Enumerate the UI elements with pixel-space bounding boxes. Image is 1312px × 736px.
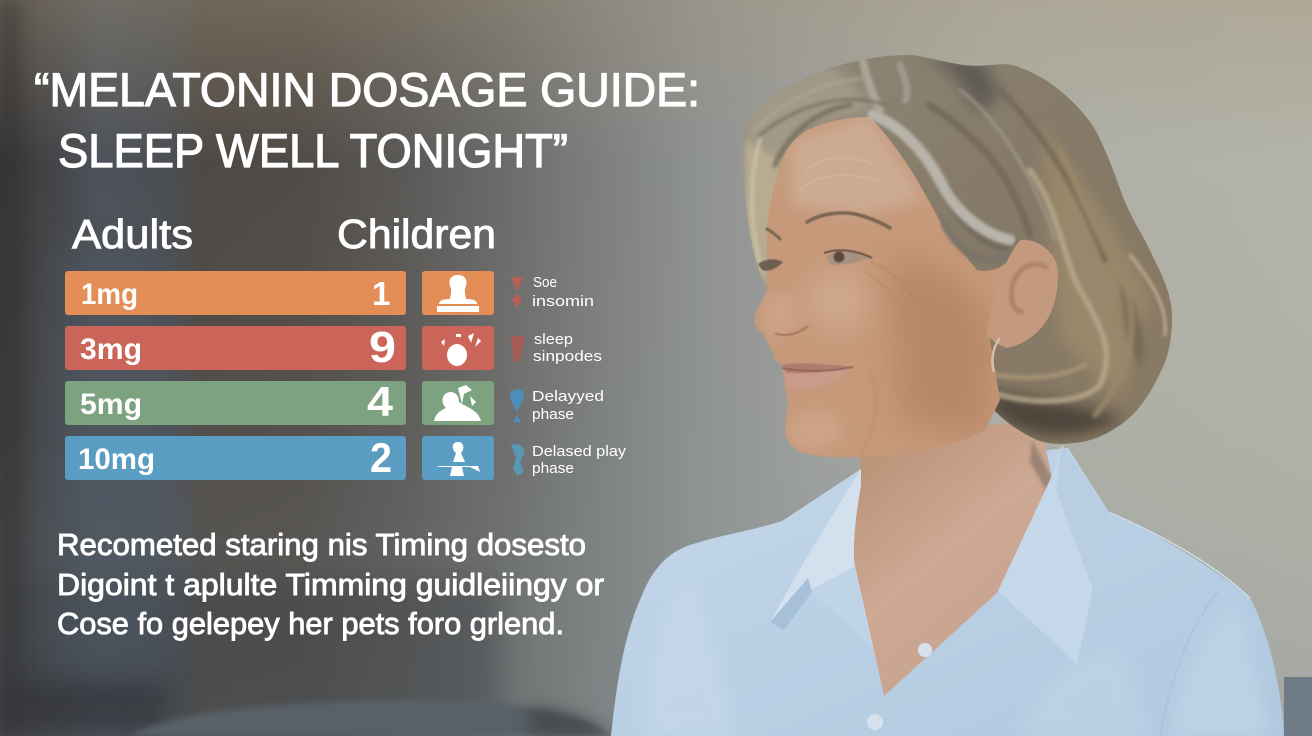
- icon: burst: [422, 326, 494, 370]
- title: “MELATONIN DOSAGE GUIDE:: [34, 63, 700, 116]
- mouth: [782, 363, 853, 391]
- grey hair sweep at hairline: [873, 115, 1015, 259]
- label: insomnia: [511, 274, 594, 310]
- hair: [742, 55, 1172, 444]
- shirt: [611, 448, 1284, 736]
- label: delayed phase: [510, 388, 604, 423]
- label: delayed phase: Delayyed: [532, 388, 604, 405]
- row: 10mg: 10mg: [78, 443, 155, 476]
- icon: resting figure: [422, 381, 494, 425]
- eyebrows: [767, 213, 890, 239]
- label: delayed sleep phase: [511, 443, 627, 477]
- label: sleep: sinpodes: [533, 348, 602, 365]
- title: SLEEP WELL TONIGHT”: [58, 124, 568, 177]
- recommendation paragraph: Recometed staring nis Timing dosesto: [57, 527, 586, 562]
- shirt buttons: [867, 643, 932, 730]
- column headings: Children: [337, 211, 496, 257]
- label: sleep: [511, 331, 602, 365]
- face: [754, 117, 1006, 458]
- label: insomnia: Soe: [533, 274, 557, 291]
- recommendation paragraph: [57, 527, 604, 641]
- earring: [992, 338, 1000, 372]
- row: 1mg: 1mg: [81, 278, 138, 311]
- title: [34, 63, 700, 177]
- row: 3mg: [65, 323, 602, 372]
- row: 3mg: 9: [369, 323, 396, 372]
- neck: [854, 420, 1052, 696]
- label: delayed phase: phase: [532, 406, 574, 423]
- row: 10mg: [65, 434, 627, 481]
- label: insomnia: insomin: [532, 293, 594, 310]
- row: 5mg: 5mg: [80, 388, 142, 421]
- portrait of smiling woman in profile: [611, 40, 1284, 736]
- collar right: [998, 445, 1109, 664]
- collar left: [770, 469, 884, 696]
- eyes: [758, 250, 872, 271]
- row: 5mg: 4: [367, 378, 394, 425]
- row: 1mg: [65, 271, 594, 315]
- column headings: [72, 211, 496, 257]
- nostril: [775, 326, 808, 335]
- label: delayed sleep phase: Delased play: [532, 443, 627, 460]
- label: delayed sleep phase: phase: [532, 460, 574, 477]
- sofa in background: [130, 677, 1312, 736]
- row: 10mg: 2: [370, 434, 392, 481]
- ear: [987, 240, 1058, 348]
- label: sleep: sleep: [534, 331, 573, 348]
- row: 1mg: 1: [372, 275, 390, 312]
- icon: person: [422, 271, 494, 315]
- recommendation paragraph: Digoint t aplulte Timming guidleiingy or: [57, 567, 604, 602]
- icon: person: [422, 436, 494, 480]
- column headings: Adults: [72, 211, 193, 257]
- recommendation paragraph: Cose fo gelepey her pets foro grlend.: [57, 606, 564, 641]
- row: 3mg: 3mg: [80, 333, 142, 366]
- row: 5mg: [65, 378, 604, 425]
